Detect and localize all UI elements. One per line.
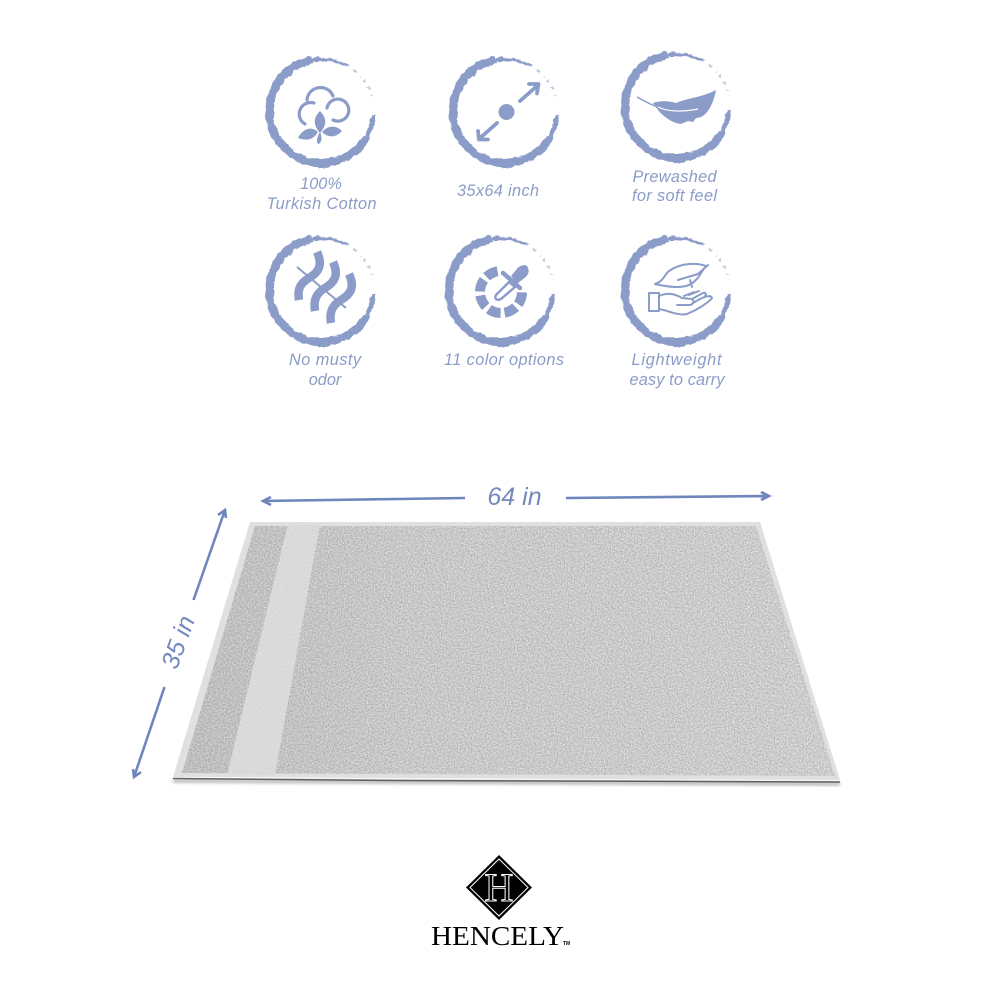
icon ring: odor <box>269 238 373 342</box>
logo: Hencely <box>431 855 570 951</box>
icon: feather <box>637 90 716 124</box>
label: Lightweight easy to carry: easy to carry <box>630 371 725 389</box>
arrow: height upper <box>194 510 226 600</box>
logo diamond: H <box>485 865 513 910</box>
icon: cotton boll <box>298 88 349 144</box>
feature: 100% Turkish Cotton <box>266 59 376 213</box>
icon ring: size <box>453 59 557 163</box>
feature: No musty odor <box>269 238 373 389</box>
label: 64 in: 64 in <box>487 483 542 511</box>
icon: colour wheel and dropper <box>480 265 529 313</box>
trademark: TM <box>563 941 570 947</box>
icon: diagonal size arrows <box>478 84 538 140</box>
arrow: width left <box>263 497 465 505</box>
label: Lightweight easy to carry: Lightweight <box>632 351 723 369</box>
height dimension: 35 in <box>133 510 226 777</box>
label: 35 in: 35 in <box>156 612 201 673</box>
towel shadow <box>173 781 840 784</box>
woven band <box>227 524 320 775</box>
label: No musty odor: odor <box>309 371 342 389</box>
icon ring: colour <box>449 238 553 342</box>
label: Prewashed for soft feel: Prewashed <box>632 168 717 186</box>
width dimension: 64 in <box>263 483 769 511</box>
feature: Prewashed for soft feel <box>625 54 729 205</box>
label: No musty odor: No musty <box>289 351 362 369</box>
icon: wavy fibres <box>297 252 352 323</box>
icon ring: lightweight <box>625 238 729 342</box>
label: 11 color options: 11 color options <box>444 351 564 369</box>
icon: leaf over open hand <box>649 264 712 314</box>
label: 100% Turkish Cotton: Turkish Cotton <box>266 195 376 213</box>
label: 100% Turkish Cotton: 100% <box>300 175 342 193</box>
feature: 11 color options <box>444 238 564 369</box>
feature: Lightweight easy to carry <box>625 238 729 389</box>
bottom edge <box>173 778 840 782</box>
arrow: height lower <box>133 687 164 777</box>
icon ring: cotton <box>269 59 373 163</box>
label: 35x64 inch: 35x64 inch <box>457 182 539 200</box>
label: Prewashed for soft feel: for soft feel <box>632 187 717 205</box>
towel <box>173 522 840 784</box>
terry shading <box>182 526 835 776</box>
logo wordmark: HENCELY <box>431 921 564 951</box>
arrow: width right <box>566 492 769 500</box>
icon ring: feather <box>625 54 729 158</box>
feature: 35x64 inch <box>453 59 557 200</box>
towel hem <box>173 522 840 780</box>
terry body <box>182 526 835 776</box>
